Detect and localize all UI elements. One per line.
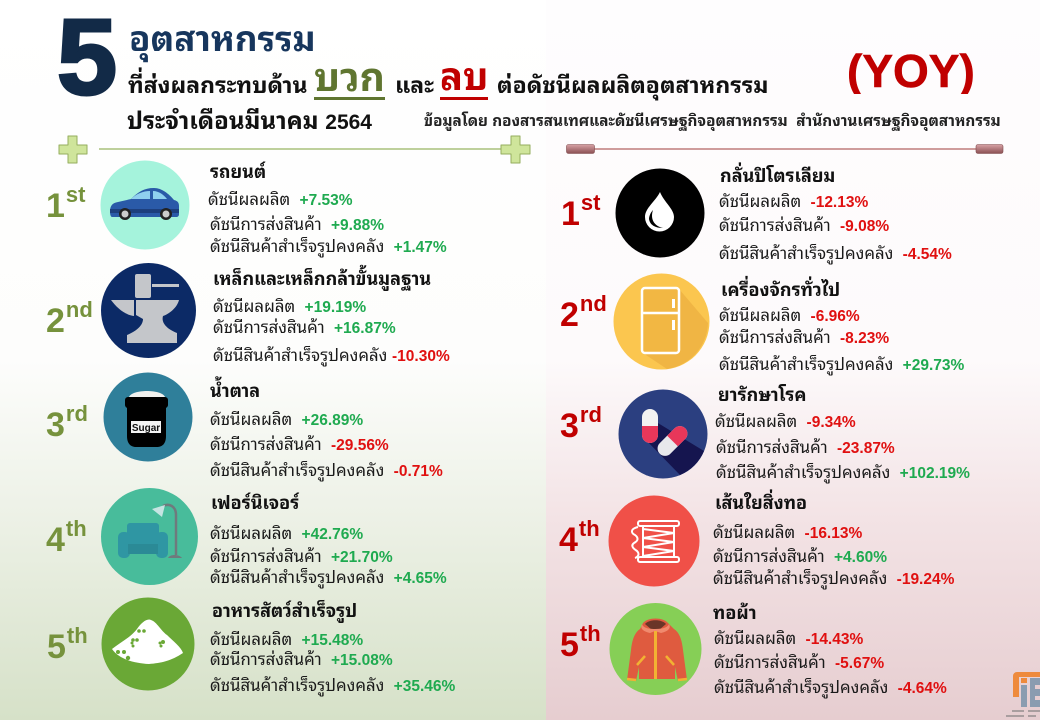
title: line 1: อุตสาหกรรม bbox=[129, 20, 316, 59]
production index: ดัชนีผลผลิต +26.89% bbox=[210, 410, 363, 429]
shipment index: ดัชนีการส่งสินค้า +15.08% bbox=[210, 650, 393, 669]
rank label: 3rd bbox=[560, 402, 602, 445]
icon: sugar jar bbox=[104, 372, 192, 462]
icon: anvil bbox=[101, 263, 196, 358]
icon: refrigerator bbox=[613, 273, 710, 370]
inventory index: ดัชนีสินค้าสำเร็จรูปคงคลัง +35.46% bbox=[210, 676, 455, 695]
negative rank 1 bbox=[561, 162, 952, 264]
production index: ดัชนีผลผลิต -14.43% bbox=[714, 629, 863, 648]
title: line 2: ที่ส่งผลกระทบด้าน bbox=[128, 72, 308, 98]
production index: ดัชนีผลผลิต -9.34% bbox=[715, 412, 856, 431]
inventory index: ดัชนีสินค้าสำเร็จรูปคงคลัง +4.65% bbox=[210, 568, 447, 587]
shipment index: ดัชนีการส่งสินค้า -29.56% bbox=[210, 435, 389, 454]
positive rank 2 bbox=[46, 263, 450, 366]
inventory index: ดัชนีสินค้าสำเร็จรูปคงคลัง +29.73% bbox=[719, 355, 964, 374]
industry name: ทอผ้า bbox=[713, 603, 757, 623]
icon: powder pile bbox=[102, 598, 194, 690]
production index: ดัชนีผลผลิต -12.13% bbox=[719, 192, 868, 211]
industry name: อาหารสัตว์สำเร็จรูป bbox=[212, 601, 357, 621]
industry name: เส้นใยสิ่งทอ bbox=[715, 493, 807, 513]
icon: oil drop bbox=[616, 168, 704, 258]
rank label: 4th bbox=[559, 516, 600, 559]
production index: ดัชนีผลผลิต +15.48% bbox=[210, 630, 363, 649]
title: line 3 month: ประจำเดือนมีนาคม 2564 bbox=[127, 108, 372, 135]
icon: sugar jar: Sugar bbox=[132, 423, 160, 434]
shipment index: ดัชนีการส่งสินค้า +21.70% bbox=[210, 547, 393, 566]
rank label: 5th bbox=[560, 621, 601, 664]
inventory index: ดัชนีสินค้าสำเร็จรูปคงคลัง +102.19% bbox=[716, 463, 970, 482]
divider: positive bbox=[58, 136, 530, 164]
industry name: รถยนต์ bbox=[210, 162, 266, 182]
shipment index: ดัชนีการส่งสินค้า +9.88% bbox=[210, 215, 384, 234]
icon: thread spool bbox=[608, 495, 700, 587]
shipment index: ดัชนีการส่งสินค้า -5.67% bbox=[714, 653, 884, 672]
inventory index: ดัชนีสินค้าสำเร็จรูปคงคลัง -4.64% bbox=[714, 678, 947, 697]
rank label: 2nd bbox=[560, 291, 607, 334]
rank label: 3rd bbox=[46, 401, 88, 444]
production index: ดัชนีผลผลิต +42.76% bbox=[210, 524, 363, 543]
production index: ดัชนีผลผลิต +7.53% bbox=[208, 190, 353, 209]
title: line 2: บวก bbox=[314, 57, 385, 100]
inventory index: ดัชนีสินค้าสำเร็จรูปคงคลัง -4.54% bbox=[719, 244, 952, 263]
industry name: กลั่นปิโตรเลียม bbox=[720, 166, 835, 186]
production index: ดัชนีผลผลิต -16.13% bbox=[713, 523, 862, 542]
positive rank 3 bbox=[46, 372, 443, 482]
industry name: เฟอร์นิเจอร์ bbox=[211, 493, 299, 513]
positive rank 1 bbox=[46, 160, 447, 258]
production index: ดัชนีผลผลิต +19.19% bbox=[213, 297, 366, 316]
inventory index: ดัชนีสินค้าสำเร็จรูปคงคลัง -0.71% bbox=[210, 461, 443, 480]
positive rank 4 bbox=[46, 488, 447, 588]
logo bbox=[1012, 670, 1040, 720]
shipment index: ดัชนีการส่งสินค้า +16.87% bbox=[213, 318, 396, 337]
positive rank 5 bbox=[47, 598, 455, 696]
shipment index: ดัชนีการส่งสินค้า +4.60% bbox=[713, 547, 887, 566]
inventory index: ดัชนีสินค้าสำเร็จรูปคงคลัง +1.47% bbox=[210, 237, 447, 256]
production index: ดัชนีผลผลิต -6.96% bbox=[719, 306, 860, 325]
industry name: เหล็กและเหล็กกล้าขั้นมูลฐาน bbox=[213, 269, 431, 289]
negative rank 2 bbox=[546, 273, 1040, 373]
industry name: เครื่องจักรทั่วไป bbox=[721, 280, 840, 300]
rank label: 1st bbox=[46, 182, 85, 225]
negative rank 5 bbox=[546, 603, 1040, 703]
source note: ข้อมูลโดย กองสารสนเทศและดัชนีเศรษฐกิจอุตสาหกรรม สำนักงานเศรษฐกิจอุตสาหกรรม bbox=[424, 113, 1001, 130]
icon: pills bbox=[618, 389, 708, 479]
icon: jacket bbox=[609, 603, 702, 695]
title: line 2 bbox=[128, 57, 768, 100]
inventory index: ดัชนีสินค้าสำเร็จรูปคงคลัง -19.24% bbox=[713, 569, 954, 588]
rank label: 5th bbox=[47, 623, 88, 666]
rank label: 2nd bbox=[46, 297, 93, 340]
title: line 2: ต่อดัชนีผลผลิตอุตสาหกรรม bbox=[497, 72, 768, 98]
shipment index: ดัชนีการส่งสินค้า -9.08% bbox=[719, 216, 889, 235]
industry name: ยารักษาโรค bbox=[718, 385, 806, 405]
shipment index: ดัชนีการส่งสินค้า -23.87% bbox=[716, 438, 895, 457]
icon: armchair and lamp bbox=[101, 488, 198, 585]
divider: negative bbox=[566, 144, 1004, 154]
rank label: 1st bbox=[561, 190, 600, 233]
rank label: 4th bbox=[46, 516, 87, 559]
negative rank 3 bbox=[546, 385, 1040, 485]
industry name: น้ำตาล bbox=[210, 381, 260, 401]
inventory index: ดัชนีสินค้าสำเร็จรูปคงคลัง -10.30% bbox=[213, 346, 450, 365]
shipment index: ดัชนีการส่งสินค้า -8.23% bbox=[719, 328, 889, 347]
negative rank 4 bbox=[546, 492, 1040, 592]
title: line 2: และ bbox=[395, 72, 434, 98]
title: line 2: ลบ bbox=[440, 57, 488, 99]
icon: car bbox=[100, 160, 190, 250]
